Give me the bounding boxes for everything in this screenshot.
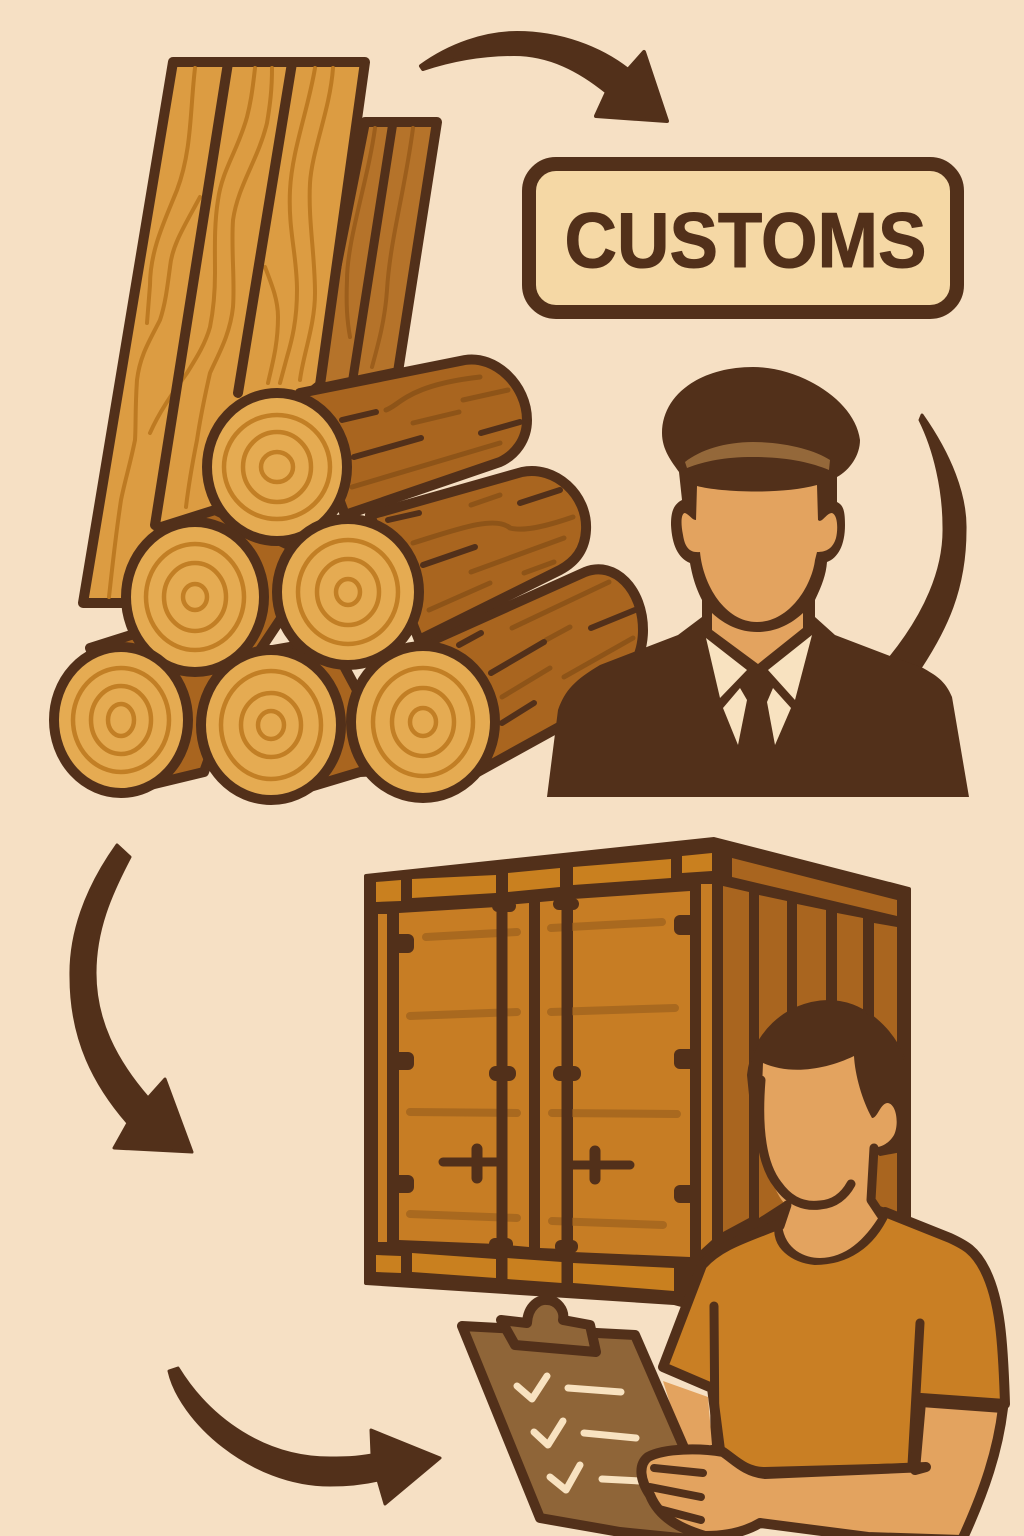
container frame [366, 839, 909, 1310]
icon: stacked logs [54, 359, 643, 800]
arrow: logs to container [71, 845, 192, 1152]
container bottom rail panels [376, 1253, 674, 1291]
icon: customs officer [547, 367, 969, 797]
clipboard [462, 1300, 700, 1536]
container hinges and latches [390, 898, 696, 1253]
customs sign [529, 164, 957, 312]
container rivet stripes [410, 922, 677, 1225]
log ends [54, 393, 495, 800]
arrow: container to inspection [169, 1368, 440, 1504]
officer collar and shirt [706, 635, 812, 745]
light bark grain [352, 377, 633, 697]
inspector fingers [650, 1468, 703, 1520]
officer sweep arrow [890, 415, 965, 668]
officer neck [712, 613, 803, 664]
icon: shipping container [366, 839, 909, 1310]
inspector face outline and smile [760, 1080, 851, 1205]
log bodies [90, 359, 643, 790]
growth rings [73, 415, 473, 779]
inspector left arm [663, 1381, 712, 1445]
inspector right arm and hand [641, 1402, 1003, 1536]
inspector shirt [663, 1212, 1005, 1472]
arrow: planks to customs [421, 33, 667, 121]
shirt fold lines [714, 1306, 920, 1465]
dark bark marks [342, 412, 635, 723]
inspector neck outline [780, 1148, 881, 1226]
container door panels [378, 884, 712, 1257]
officer face [682, 485, 837, 622]
inspector hair [748, 1001, 907, 1155]
container side panels [723, 858, 897, 1232]
front planks [83, 62, 365, 603]
officer cap band [685, 442, 830, 470]
icon: wooden planks [83, 62, 437, 603]
icon: inspector with clipboard [462, 1001, 1005, 1536]
customs label: CUSTOMS [564, 196, 926, 284]
container top rail panels [376, 853, 712, 902]
officer silhouette [547, 367, 969, 797]
inspector head and neck [761, 1056, 897, 1258]
container lock bars [443, 888, 630, 1285]
back planks [312, 122, 437, 390]
